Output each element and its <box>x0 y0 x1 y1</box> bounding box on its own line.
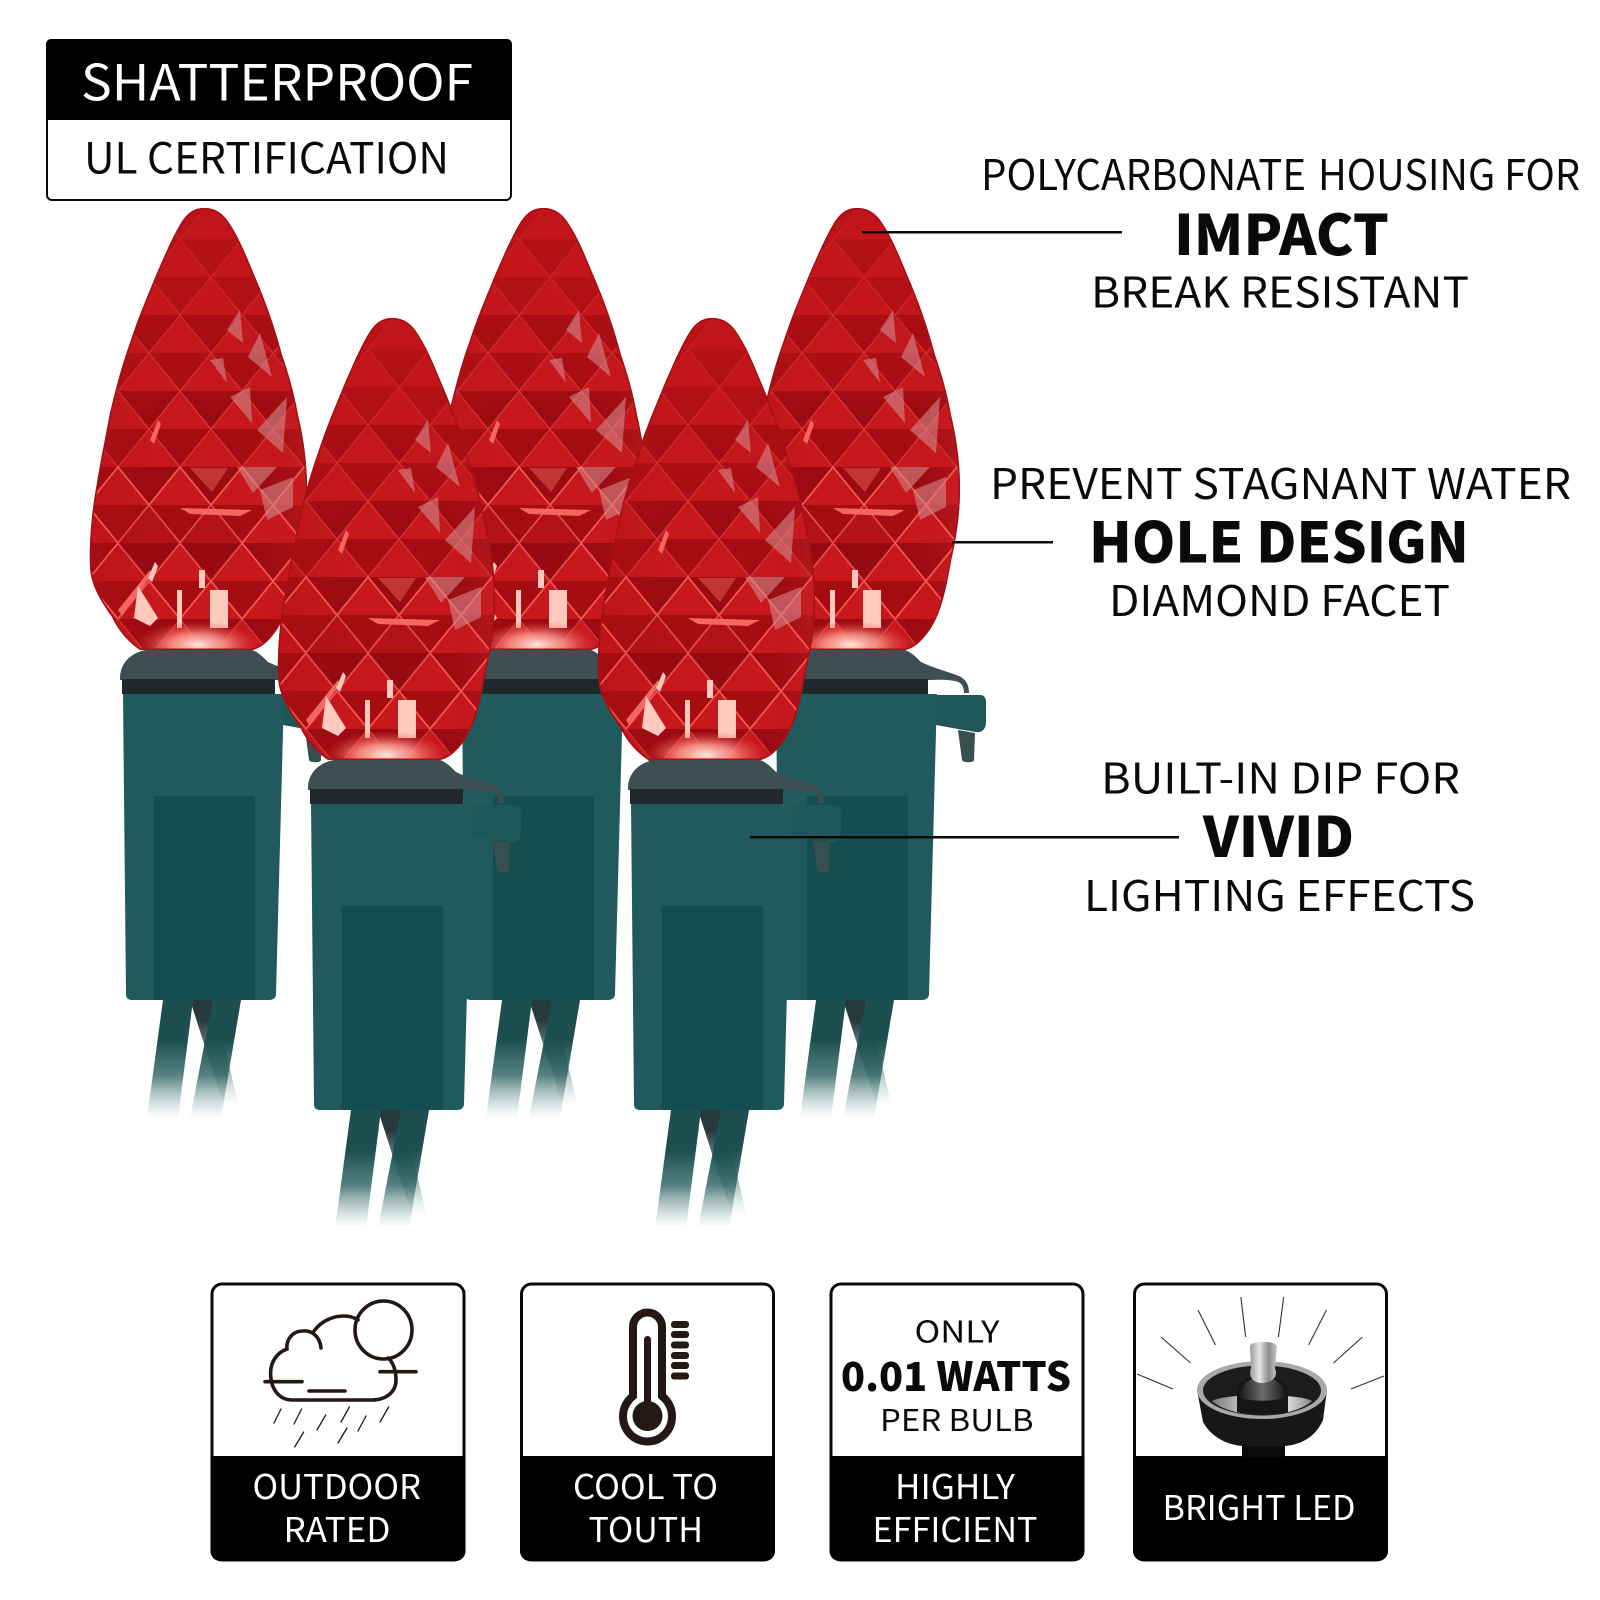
callout: impact: IMPACT <box>1174 191 1389 272</box>
panel: highly efficient: HIGHLY <box>895 1460 1016 1509</box>
panel: cool to touch: COOL TO <box>573 1460 718 1509</box>
panel: outdoor rated: OUTDOOR <box>252 1460 421 1509</box>
icon: thermometer <box>623 1312 689 1442</box>
callout: impact: HOUSING FOR <box>1318 142 1580 203</box>
callout: impact: BREAK RESISTANT <box>1091 260 1469 320</box>
illustration: front-row bulb left <box>273 315 521 1228</box>
panel: outdoor rated: RATED <box>284 1503 390 1552</box>
callout: vivid: VIVID <box>1202 793 1354 874</box>
panel: highly efficient: ONLY <box>914 1308 1000 1352</box>
callout: impact <box>862 142 1580 320</box>
callout: vivid: BUILT-IN DIP FOR <box>1101 746 1460 806</box>
badge: shatterproof UL certification: UL CERTIFICATION <box>84 124 449 186</box>
badge: shatterproof UL certification: SHATTERPROOF <box>81 44 473 116</box>
illustration: back-row bulb left <box>85 205 333 1118</box>
panel: cool to touch: TOUTH <box>588 1503 703 1552</box>
callout: impact: POLYCARBONATE <box>981 142 1306 203</box>
icon: LED with holder and rays <box>1137 1297 1384 1457</box>
panel: cool to touch <box>520 1284 775 1561</box>
illustration: back-row bulb right <box>738 205 986 1118</box>
callout: hole design: HOLE DESIGN <box>1089 498 1469 580</box>
panel: bright LED: BRIGHT LED <box>1162 1481 1356 1530</box>
callout: hole design <box>952 451 1571 629</box>
callout: vivid <box>750 746 1475 924</box>
badge: shatterproof UL certification <box>46 39 512 200</box>
panel: highly efficient <box>830 1284 1084 1561</box>
callout: vivid: LIGHTING EFFECTS <box>1084 863 1475 924</box>
panel: highly efficient: 0.01 WATTS <box>841 1345 1071 1403</box>
illustration: back-row bulb middle <box>424 205 672 1118</box>
panel: bright LED <box>1133 1284 1388 1561</box>
panel: highly efficient: PER BULB <box>880 1396 1034 1440</box>
icon: cloud, sun and rain <box>265 1301 416 1447</box>
illustration: front-row bulb right <box>593 315 841 1228</box>
panel: highly efficient: EFFICIENT <box>872 1503 1038 1552</box>
callout: hole design: DIAMOND FACET <box>1109 568 1450 629</box>
panel: outdoor rated <box>210 1284 466 1561</box>
callout: hole design: PREVENT STAGNANT WATER <box>990 451 1571 512</box>
